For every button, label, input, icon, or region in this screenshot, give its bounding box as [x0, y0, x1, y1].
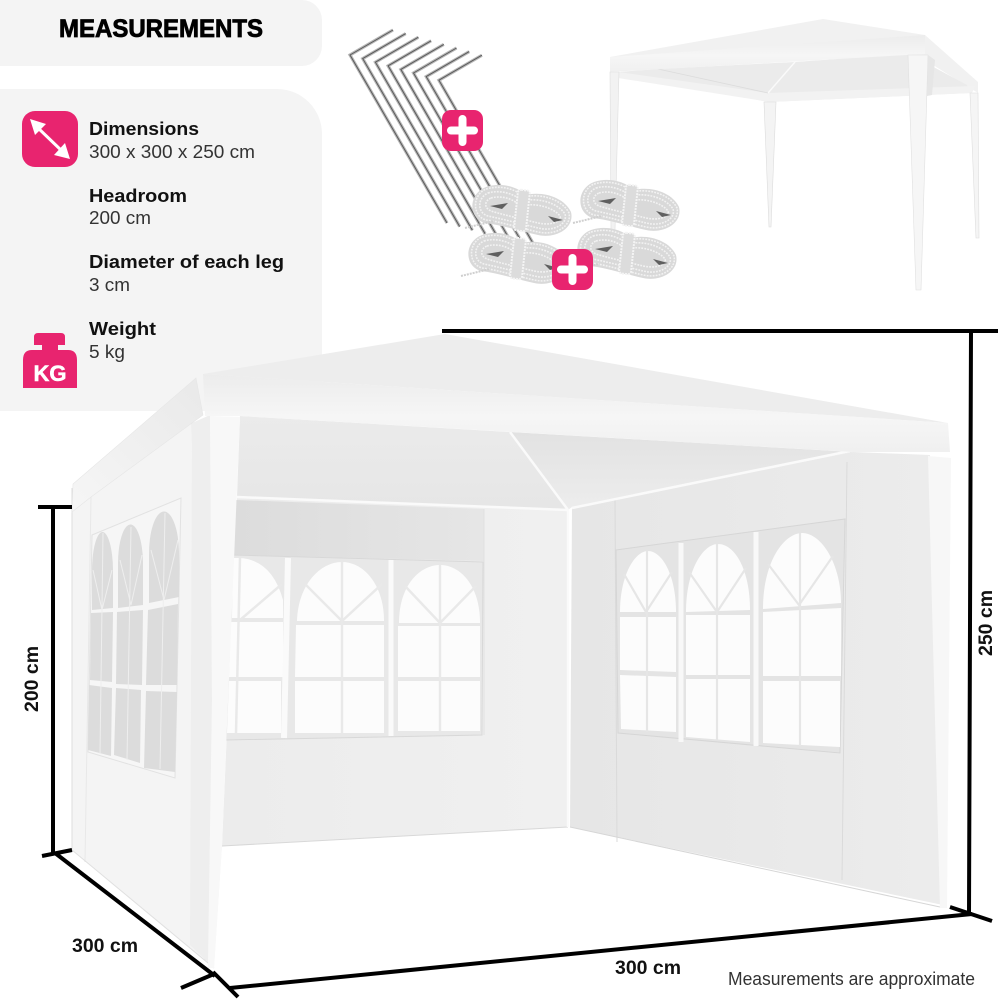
text: diameter of each leg: 3 cm	[89, 275, 130, 295]
text: dimensions: 300 x 300 x 250 cm	[89, 142, 255, 162]
icon: rope coil 1	[465, 185, 572, 236]
illustration: ground stakes	[350, 30, 536, 248]
back wall	[222, 497, 568, 846]
icon: rope coil 4	[570, 228, 677, 279]
heading: measurements: MEASUREMENTS	[59, 15, 263, 43]
label: 300 cm width: 300 cm	[615, 957, 681, 979]
right window	[616, 519, 845, 753]
text: headroom: Headroom	[89, 186, 187, 206]
front left leg	[208, 416, 240, 968]
dimension: 300 cm width	[230, 914, 972, 988]
dimension: 200 cm headroom	[21, 507, 72, 853]
label: 250 cm: 250 cm	[975, 590, 997, 656]
panel: specifications	[0, 89, 322, 411]
icon: weight kg: KG	[34, 361, 66, 386]
illustration: main gazebo with walls	[72, 334, 951, 968]
icon: plus ropes	[552, 249, 593, 290]
dimension: 300 cm depth	[42, 850, 238, 997]
label: 200 cm: 200 cm	[21, 646, 43, 712]
text: weight	[89, 319, 156, 362]
label: 300 cm depth: 300 cm	[72, 935, 138, 957]
text: diameter of each leg	[89, 252, 284, 295]
front right leg	[928, 456, 951, 908]
note: measurements are approximate: Measurements are approximate	[728, 969, 975, 989]
text: weight: Weight	[89, 319, 156, 339]
frame rods	[237, 432, 850, 827]
text: weight: 5 kg	[89, 342, 125, 362]
illustration: small gazebo frame	[610, 19, 979, 290]
icon: weight kg	[23, 333, 77, 388]
panel: measurements heading	[0, 0, 322, 66]
icon: plus stakes	[442, 110, 483, 151]
roof top	[203, 334, 948, 423]
text: headroom	[89, 186, 187, 228]
icon: rope coil 2	[573, 180, 680, 231]
icon: dimensions arrow	[22, 111, 78, 167]
left roof slope	[72, 378, 203, 512]
ceiling	[237, 416, 853, 510]
text: diameter of each leg: Diameter of each leg	[89, 252, 284, 272]
text: dimensions: Dimensions	[89, 119, 199, 139]
right wall	[570, 452, 943, 907]
left window	[88, 498, 181, 778]
back window	[226, 555, 483, 740]
roof front valance	[203, 374, 950, 452]
left wall	[72, 415, 222, 968]
text: dimensions	[89, 119, 255, 162]
text: headroom: 200 cm	[89, 208, 151, 228]
icon: rope coil 3	[461, 233, 568, 284]
